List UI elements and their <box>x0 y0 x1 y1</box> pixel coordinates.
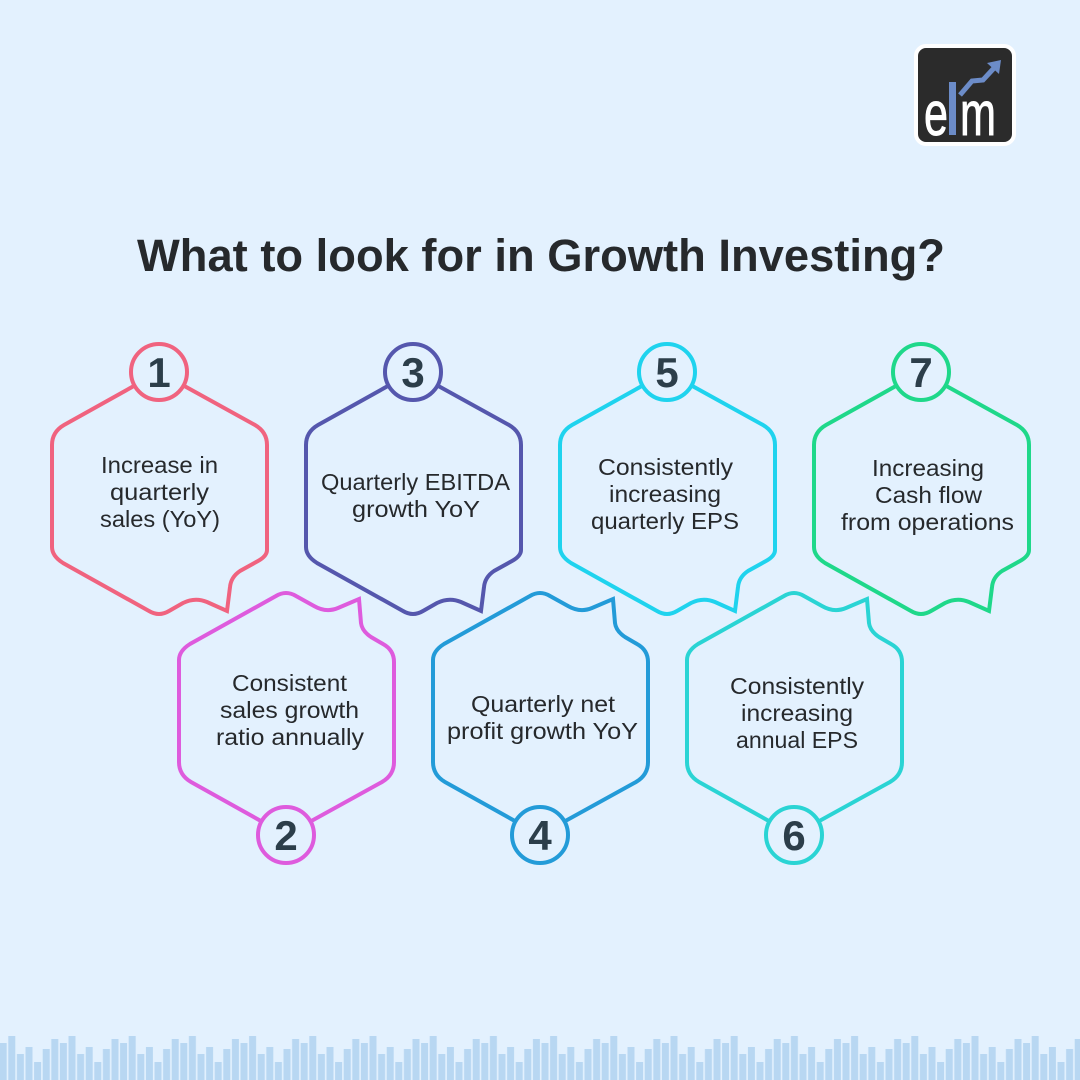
title: What to look for in Growth Investing? <box>137 230 945 281</box>
step 4: quarterly net profit growth <box>433 593 648 863</box>
step 6: consistently increasing annual EPS <box>687 593 902 863</box>
logo: elm <box>916 46 1014 149</box>
step 4: quarterly net profit growth: profit growth YoY <box>447 718 638 744</box>
step 5: consistently increasing quarterly EPS: quarterly EPS <box>591 508 739 534</box>
step 5: consistently increasing quarterly EPS: Consistently <box>598 454 734 480</box>
footer bar pattern <box>0 1030 1080 1080</box>
step 1: increase in quarterly sales: 1 <box>147 349 171 396</box>
step 1: increase in quarterly sales: quarterly <box>110 479 210 505</box>
step 7: increasing cash flow from operations: 7 <box>909 349 933 396</box>
step 2: consistent sales growth ratio <box>179 593 394 863</box>
step 7: increasing cash flow from operations <box>814 344 1029 614</box>
step 7: increasing cash flow from operations: Cash flow <box>875 482 982 508</box>
step 3: quarterly EBITDA growth: 3 <box>401 349 425 396</box>
step 2: consistent sales growth ratio: Consistent <box>232 670 348 696</box>
step 4: quarterly net profit growth: 4 <box>528 812 552 859</box>
step 1: increase in quarterly sales: Increase in <box>101 452 218 478</box>
step 3: quarterly EBITDA growth: Quarterly EBITDA <box>321 469 511 495</box>
step 6: consistently increasing annual EPS: 6 <box>782 812 806 859</box>
step 1: increase in quarterly sales <box>52 344 267 614</box>
step 3: quarterly EBITDA growth <box>306 344 521 614</box>
step 6: consistently increasing annual EPS: increasing <box>741 700 853 726</box>
step 7: increasing cash flow from operations: from operations <box>841 509 1014 535</box>
step 3: quarterly EBITDA growth: growth YoY <box>352 496 480 522</box>
step 4: quarterly net profit growth: Quarterly net <box>471 691 616 717</box>
step 2: consistent sales growth ratio: sales growth <box>220 697 359 723</box>
step 7: increasing cash flow from operations: Increasing <box>872 455 984 481</box>
step 2: consistent sales growth ratio: ratio annually <box>216 724 365 750</box>
step 2: consistent sales growth ratio: 2 <box>274 812 298 859</box>
step 5: consistently increasing quarterly EPS <box>560 344 775 614</box>
step 6: consistently increasing annual EPS: Consistently <box>730 673 865 699</box>
logo: elm: m <box>960 80 996 149</box>
step 1: increase in quarterly sales: sales (YoY) <box>100 506 220 532</box>
step 5: consistently increasing quarterly EPS: increasing <box>609 481 721 507</box>
logo: elm: e <box>924 80 948 149</box>
step 6: consistently increasing annual EPS: annual EPS <box>736 727 858 753</box>
step 5: consistently increasing quarterly EPS: 5 <box>655 349 679 396</box>
